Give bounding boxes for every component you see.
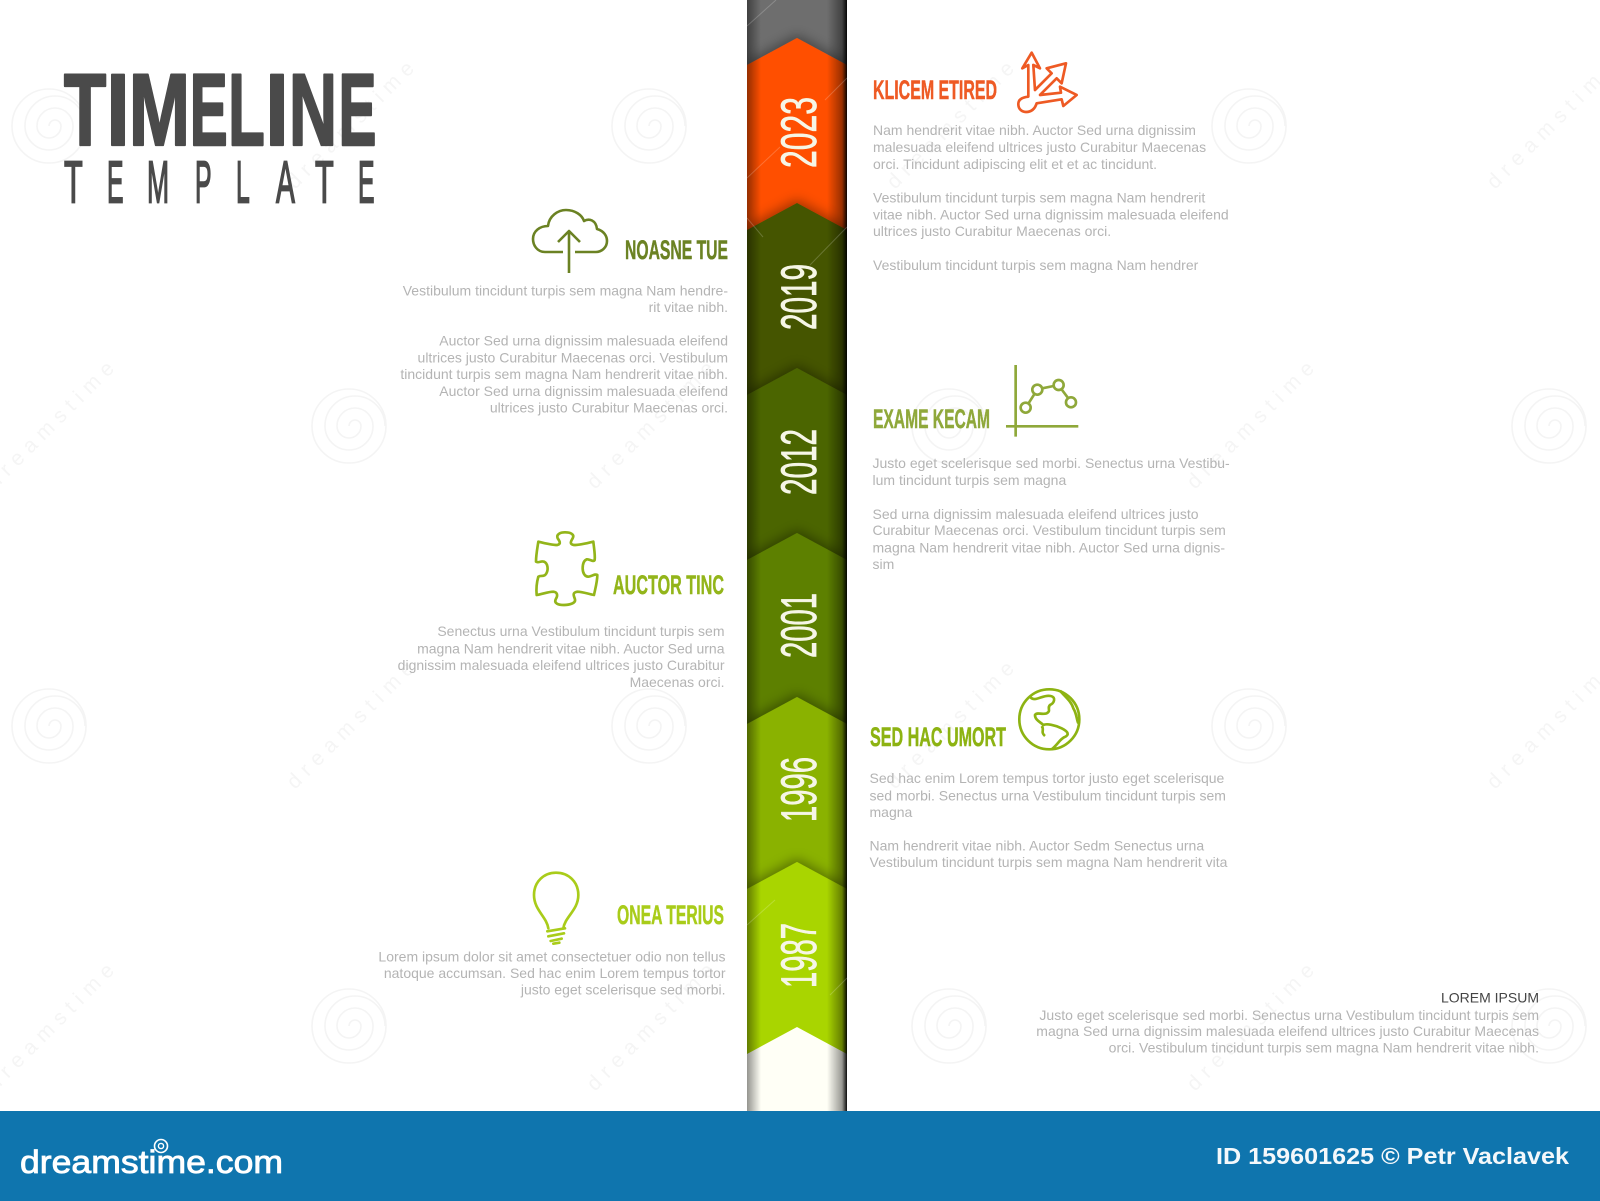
text block: sim (872, 556, 894, 572)
title (64, 52, 376, 216)
text block: ultrices justo Curabitur Maecenas orci. (490, 400, 728, 416)
text block: Curabitur Maecenas orci. Vestibulum tincidunt turpis sem (872, 522, 1226, 538)
watermark pattern: dreamstime (1182, 959, 1319, 1096)
text block: magna Nam hendrerit vitae nibh. Auctor Sed urna dignis- (872, 540, 1225, 556)
text block: rit vitae nibh. (649, 299, 728, 315)
title: E (358, 149, 375, 216)
watermark pattern: dreamstime (582, 357, 719, 494)
year labels: 2023 (771, 97, 827, 168)
text block: justo eget scelerisque sed morbi. (520, 982, 726, 998)
watermark pattern: dreamstime (282, 57, 419, 194)
title: A (276, 149, 295, 215)
text block: Nam hendrerit vitae nibh. Auctor Sed urna dignissim (873, 122, 1196, 138)
title: N (289, 54, 337, 168)
icon: light bulb (534, 873, 578, 944)
text block: Sed hac enim Lorem tempus tortor justo eget scelerisque (870, 770, 1225, 786)
text block: ultrices justo Curabitur Maecenas orci. Vestibulum (418, 350, 728, 366)
text block (378, 948, 726, 998)
title: L (228, 52, 265, 167)
text block: lorem ipsum note: LOREM IPSUM (1441, 990, 1539, 1006)
text block: lorem ipsum note: magna Sed urna dignissim malesuada eleifend ultrices justo Curabitur Maecenas (1036, 1023, 1539, 1039)
title: I (106, 53, 130, 167)
text block: Sed urna dignissim malesuada eleifend ultrices justo (872, 506, 1199, 522)
text block: natoque accumsan. Sed hac enim Lorem tempus tortor (384, 965, 726, 981)
heading: KLICEM ETIRED (873, 75, 997, 105)
text block: magna (870, 804, 913, 820)
heading: ONEA TERIUS (617, 900, 724, 930)
text block (398, 623, 725, 690)
watermark pattern: dreamstime (582, 959, 719, 1096)
text block: Justo eget scelerisque sed morbi. Senectus urna Vestibu- (872, 455, 1230, 471)
panel: noasne tue (400, 210, 728, 416)
watermark pattern: dreamstime (882, 657, 1019, 794)
panel: exame kecam (872, 365, 1230, 572)
icon: puzzle piece (536, 532, 597, 605)
heading: NOASNE TUE (625, 235, 728, 265)
title: I (265, 53, 289, 167)
chevron 1987 (747, 854, 846, 1054)
icon: cloud upload (533, 210, 607, 273)
text block: vitae nibh. Auctor Sed urna dignissim malesuada eleifend (873, 206, 1229, 222)
chevron 2012 (747, 364, 843, 560)
title: P (195, 149, 212, 216)
chevron 1996 (747, 690, 846, 889)
text block: Vestibulum tincidunt turpis sem magna Nam hendre- (403, 282, 728, 298)
year labels: 1996 (771, 757, 827, 822)
year labels: 2012 (771, 429, 827, 495)
text block: Nam hendrerit vitae nibh. Auctor Sedm Senectus urna (870, 838, 1204, 854)
year labels (771, 97, 827, 988)
title: E (339, 53, 376, 167)
title: E (107, 149, 124, 216)
text block: Lorem ipsum dolor sit amet consectetuer odio non tellus (378, 948, 726, 964)
title: T (315, 149, 334, 215)
text block (400, 282, 728, 416)
central timeline strip (747, 0, 847, 1111)
text block: Vestibulum tincidunt turpis sem magna Nam hendrer (873, 257, 1199, 273)
text block: magna Nam hendrerit vitae nibh. Auctor Sed urna (417, 640, 725, 656)
chevron end (747, 1027, 847, 1111)
watermark pattern: dreamstime (282, 657, 419, 794)
chevron 2023 (747, 32, 847, 230)
text block: lum tincidunt turpis sem magna (872, 472, 1066, 488)
text block (873, 122, 1229, 273)
chevron 2001 (747, 528, 845, 724)
year labels: 2001 (771, 593, 827, 658)
text block: malesuada eleifend ultrices justo Curabitur Maecenas (873, 139, 1206, 155)
icon: arrows (1018, 53, 1077, 112)
text block: Auctor Sed urna dignissim malesuada eleifend (439, 332, 728, 348)
text block: Vestibulum tincidunt turpis sem magna Nam hendrerit vita (870, 854, 1228, 870)
panel: onea terius (378, 873, 726, 998)
heading: SED HAC UMORT (870, 722, 1006, 752)
chevron 2019 (747, 194, 847, 395)
text block: lorem ipsum note: orci. Vestibulum tincidunt turpis sem magna Nam hendrerit vitae nibh. (1109, 1040, 1539, 1056)
panel: auctor tinc (398, 532, 725, 690)
year labels: 2019 (771, 264, 827, 330)
text block: Auctor Sed urna dignissim malesuada eleifend (439, 383, 728, 399)
title: T (64, 54, 106, 167)
panel: klicem etired (873, 53, 1229, 273)
text block: tincidunt turpis sem magna Nam hendrerit vitae nibh. (400, 366, 728, 382)
icon: line chart (1006, 365, 1078, 437)
footer bar (0, 1111, 1600, 1201)
heading: AUCTOR TINC (613, 570, 724, 600)
text block (872, 455, 1230, 572)
title: M (129, 53, 190, 167)
text block: lorem ipsum note (1036, 990, 1539, 1056)
text block: ultrices justo Curabitur Maecenas orci. (873, 223, 1111, 239)
heading: EXAME KECAM (873, 404, 990, 434)
text block: dignissim malesuada eleifend ultrices justo Curabitur (398, 657, 725, 673)
text block (870, 770, 1228, 870)
text block: sed morbi. Senectus urna Vestibulum tincidunt turpis sem (870, 788, 1226, 804)
watermark pattern: dreamstime (1182, 357, 1319, 494)
title: E (190, 53, 228, 167)
panel: sed hac umort (870, 689, 1228, 870)
text block: lorem ipsum note: Justo eget scelerisque sed morbi. Senectus urna Vestibulum tincidunt turpis sem (1039, 1007, 1539, 1023)
title: L (236, 149, 250, 216)
text block: Vestibulum tincidunt turpis sem magna Nam hendrerit (873, 190, 1205, 206)
footer credit: ID 159601625 © Petr Vaclavek (1216, 1143, 1570, 1169)
watermark pattern: dreamstime (882, 57, 1019, 194)
icon: globe (1019, 689, 1079, 749)
text block: Maecenas orci. (630, 674, 724, 690)
footer logo: dreamstime.com (20, 1144, 283, 1180)
title: T (64, 149, 83, 215)
text block: Senectus urna Vestibulum tincidunt turpis sem (437, 623, 724, 639)
title: M (147, 150, 169, 215)
text block: orci. Tincidunt adipiscing elit et et ac tincidunt. (873, 156, 1157, 172)
year labels: 1987 (771, 923, 827, 988)
